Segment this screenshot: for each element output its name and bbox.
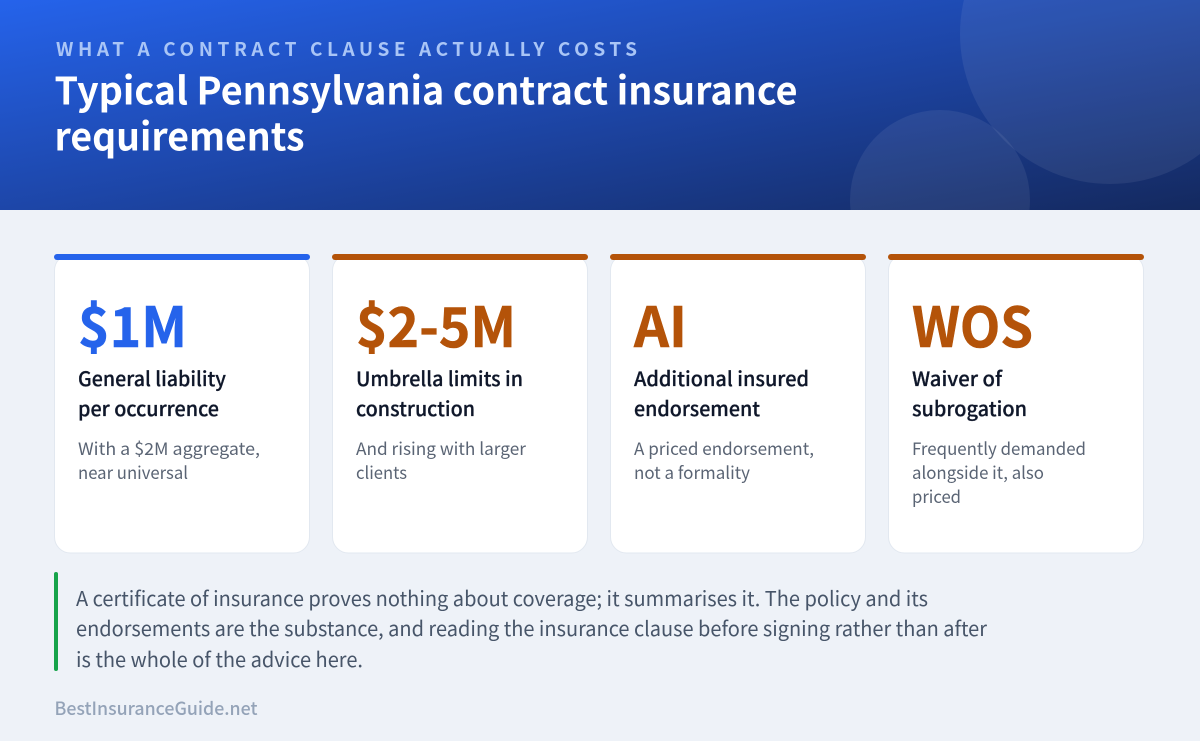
panel: waiver of subrogation card: alongside it, also bbox=[912, 459, 1044, 484]
panel: additional insured card bbox=[610, 254, 866, 553]
panel: umbrella limits card: $2-5M bbox=[356, 283, 516, 363]
panel: umbrella limits card: construction bbox=[356, 393, 475, 422]
callout note: endorsements are the substance, and reading the insurance clause before signing rather than after bbox=[76, 612, 987, 642]
panel: waiver of subrogation card: subrogation bbox=[912, 393, 1027, 422]
panel: general liability card: General liability bbox=[78, 363, 226, 392]
panel: general liability card: per occurrence bbox=[78, 393, 219, 422]
panel: waiver of subrogation card: Waiver of bbox=[912, 363, 1003, 392]
panel: general liability card: $1M bbox=[78, 283, 187, 363]
callout note bbox=[54, 572, 987, 673]
callout note: A certificate of insurance proves nothing about coverage; it summarises it. The policy and its bbox=[76, 582, 928, 612]
panel: waiver of subrogation card: WOS bbox=[912, 283, 1033, 363]
panel: general liability card: With a $2M aggregate, bbox=[78, 435, 260, 460]
title: Typical Pennsylvania contract insurance bbox=[54, 60, 798, 116]
panel: umbrella limits card: Umbrella limits in bbox=[356, 363, 523, 392]
eyebrow heading: WHAT A CONTRACT CLAUSE ACTUALLY COSTS bbox=[56, 35, 637, 62]
title: requirements bbox=[54, 106, 304, 162]
panel: waiver of subrogation card: Frequently demanded bbox=[912, 435, 1086, 460]
panel: umbrella limits card bbox=[332, 254, 588, 553]
panel: umbrella limits card: And rising with larger bbox=[356, 435, 526, 460]
panel: general liability card bbox=[54, 254, 310, 553]
panel: additional insured card: AI bbox=[633, 283, 687, 363]
footer brand: BestInsuranceGuide.net bbox=[54, 695, 258, 721]
panel: additional insured card: endorsement bbox=[634, 393, 760, 422]
panel: waiver of subrogation card: priced bbox=[912, 483, 961, 508]
callout note: is the whole of the advice here. bbox=[76, 643, 363, 673]
panel: additional insured card: not a formality bbox=[634, 459, 750, 484]
title bbox=[54, 60, 798, 162]
panel: waiver of subrogation card bbox=[888, 254, 1144, 553]
panel: additional insured card: Additional insured bbox=[634, 363, 809, 392]
panel: additional insured card: A priced endorsement, bbox=[634, 435, 814, 460]
header banner bbox=[0, 0, 1200, 210]
panel: general liability card: near universal bbox=[78, 459, 188, 484]
panel: umbrella limits card: clients bbox=[356, 459, 407, 484]
